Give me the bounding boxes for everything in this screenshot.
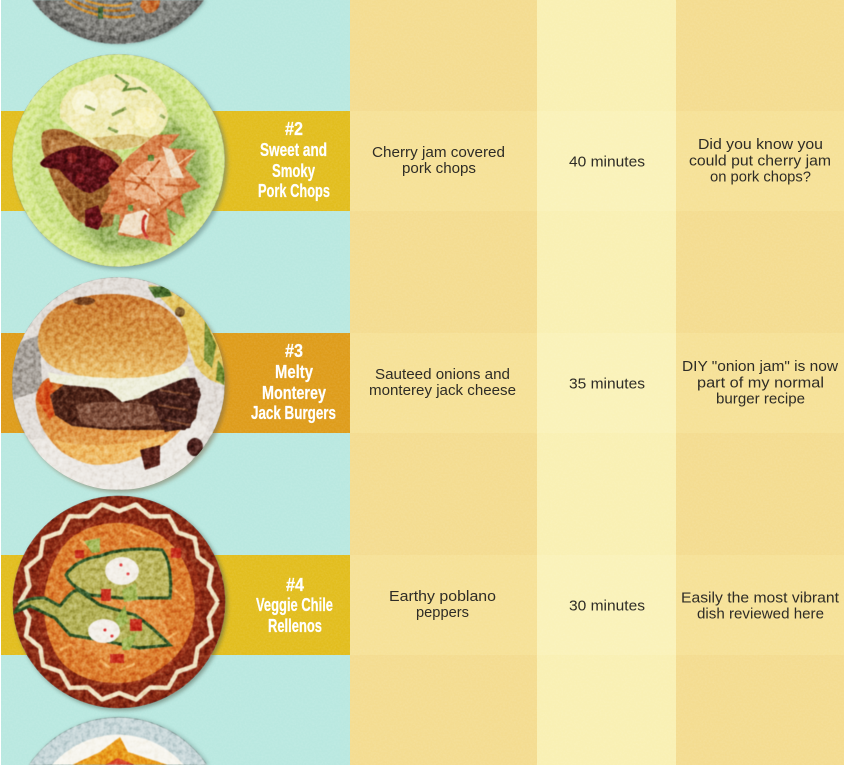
- text: row 2 comment: could put cherry jam: [689, 152, 831, 170]
- panel: table columns: [350, 0, 844, 765]
- band: row 2 title bar: [1, 111, 350, 211]
- title: #2 Sweet and Smoky Pork Chops: Smoky: [272, 161, 315, 181]
- mashed potato: [60, 74, 168, 150]
- bottom bun: [36, 378, 184, 464]
- title: #3 Melty Monterey Jack Burgers: Monterey: [262, 383, 326, 403]
- text: row 4 flavor: [389, 588, 496, 621]
- text: row 4 time: 30 minutes: [569, 598, 645, 614]
- title: #4 Veggie Chile Rellenos: #4: [286, 575, 304, 595]
- zucchini side: [148, 285, 225, 385]
- text: row 3 flavor: Sauteed onions and: [375, 366, 510, 383]
- panel: aqua background column: [1, 0, 350, 765]
- text: row 2 flavor: [372, 144, 505, 177]
- title: #3 Melty Monterey Jack Burgers: Jack Burgers: [251, 403, 336, 423]
- title: #4 Veggie Chile Rellenos: Rellenos: [268, 616, 322, 636]
- title: #4 Veggie Chile Rellenos: [256, 575, 333, 636]
- title: #4 Veggie Chile Rellenos: Veggie Chile: [256, 595, 333, 615]
- text: row 3 time: 35 minutes: [569, 376, 645, 392]
- carrot and apple slaw: [100, 134, 201, 246]
- chile top: [66, 549, 171, 598]
- spanish rice: [44, 523, 195, 683]
- text: row 2 time: 40 minutes: [569, 154, 645, 170]
- image: plate 4 veggie chile rellenos: [12, 496, 228, 710]
- band: row 3 title bar: [1, 333, 350, 433]
- text: row 2 flavor: Cherry jam covered: [372, 144, 505, 161]
- text: row 2 comment: on pork chops?: [710, 168, 811, 186]
- title: #2 Sweet and Smoky Pork Chops: [258, 119, 330, 201]
- text: row 3 comment: burger recipe: [716, 390, 805, 408]
- title: #2 Sweet and Smoky Pork Chops: #2: [285, 119, 303, 139]
- avocado cubes: [84, 538, 100, 553]
- image: plate 1 grey plate with noodles: [32, 0, 206, 44]
- text: row 2 comment: [689, 136, 831, 186]
- text: row 4 flavor: Earthy poblano: [389, 588, 496, 605]
- image: plate 5 rice dish: [29, 717, 209, 765]
- text: row 4 flavor: peppers: [416, 604, 469, 621]
- band: row 4 title bar: [1, 555, 350, 655]
- painted rim: [20, 504, 218, 700]
- text: row 3 flavor: monterey jack cheese: [369, 382, 516, 399]
- text: row 3 comment: part of my normal: [697, 374, 824, 392]
- text: row 2 comment: Did you know you: [698, 136, 823, 153]
- melted cheese: [48, 366, 190, 402]
- tomato pieces: [101, 589, 111, 601]
- top bun: [38, 294, 188, 378]
- title: #3 Melty Monterey Jack Burgers: #3: [285, 341, 303, 361]
- text: row 3 flavor: [369, 366, 516, 399]
- title: #2 Sweet and Smoky Pork Chops: Pork Chops: [258, 181, 330, 201]
- text: row 2 flavor: pork chops: [402, 160, 476, 177]
- title: #2 Sweet and Smoky Pork Chops: Sweet and: [260, 140, 327, 160]
- image: plate 2 pork chops with mash and slaw: [12, 54, 228, 270]
- text: row 4 comment: Easily the most vibrant: [681, 590, 840, 606]
- chile bottom: [15, 590, 170, 648]
- title: #3 Melty Monterey Jack Burgers: Melty: [275, 362, 313, 382]
- text: row 4 comment: dish reviewed here: [697, 606, 824, 622]
- text: row 3 comment: DIY "onion jam" is now: [682, 358, 838, 375]
- title: #3 Melty Monterey Jack Burgers: [251, 341, 336, 423]
- text: row 3 comment: [682, 358, 838, 408]
- pork chop: [41, 129, 122, 227]
- shadow of food on plate: [75, 115, 208, 252]
- beef patty and onions: [50, 378, 200, 430]
- image: plate 3 burger: [12, 277, 228, 492]
- text: row 4 comment: [681, 590, 840, 622]
- cherry jam: [40, 146, 120, 193]
- sour cream dollops: [105, 557, 139, 585]
